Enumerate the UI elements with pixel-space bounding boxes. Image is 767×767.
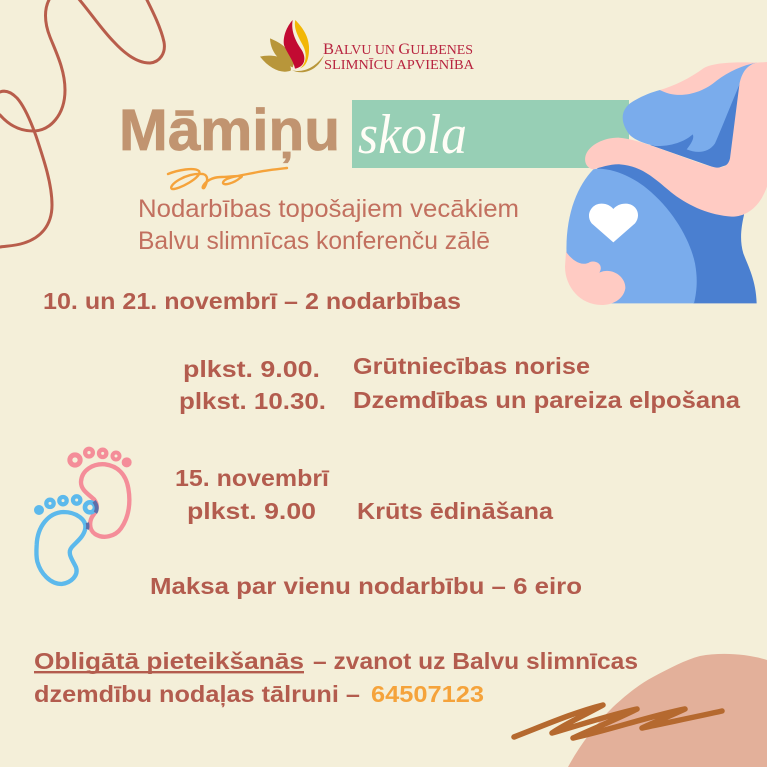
- decorative blob: [568, 654, 767, 767]
- schedule rows: plkst. 10.30.: [179, 388, 326, 414]
- icon: baby feet: [34, 449, 132, 584]
- schedule rows: plkst. 9.00.: [183, 356, 320, 382]
- orange squiggle: [168, 168, 287, 189]
- light blue top: [623, 63, 757, 152]
- registration note: dzemdību nodaļas tālruni –: [34, 681, 360, 707]
- registration note: Obligātā pieteikšanās: [34, 648, 304, 674]
- session: 15 November: [175, 465, 553, 524]
- logo emblem: [260, 20, 324, 72]
- skin: neck and chest: [660, 62, 757, 95]
- hand: [565, 252, 625, 305]
- subtitle: Balvu slimnīcas konferenču zālē: [138, 227, 490, 255]
- registration note: – zvanot uz Balvu slimnīcas: [313, 648, 638, 674]
- green title box: [352, 100, 629, 168]
- subtitle: Nodarbības topošajiem vecākiem: [138, 195, 519, 223]
- logo text: SLIMNĪCU APVIENĪBA: [324, 57, 475, 73]
- title: Māmiņu: Māmiņu: [119, 98, 340, 163]
- schedule rows: [179, 353, 740, 414]
- decorative curve: top left line: [0, 0, 164, 247]
- session: 15 November: plkst. 9.00: [187, 498, 316, 524]
- title: skola: skola: [358, 104, 467, 166]
- schedule rows: Dzemdības un pareiza elpošana: [353, 387, 740, 413]
- orange-brown scribble: [514, 705, 722, 738]
- session: 15 November: 15. novembrī: [175, 465, 330, 491]
- session: 15 November: Krūts ēdināšana: [357, 498, 553, 524]
- dark blue chest: [650, 83, 740, 168]
- logo: [260, 20, 475, 73]
- logo text: BALVU UN GULBENES: [323, 41, 473, 58]
- illustration: pregnant woman: [565, 62, 767, 305]
- skin: arm on belly: [585, 62, 767, 217]
- registration note: [34, 648, 638, 707]
- registration note: 64507123: [371, 681, 484, 707]
- logo text: [323, 41, 475, 73]
- subtitle: [138, 195, 519, 255]
- schedule rows: Grūtniecības norise: [353, 353, 590, 379]
- schedule heading: 10. un 21. novembrī – 2 nodarbības: [43, 288, 461, 314]
- price: Maksa par vienu nodarbību – 6 eiro: [150, 573, 582, 599]
- dark blue body: [597, 157, 757, 303]
- heart: [589, 204, 638, 242]
- light blue belly: [566, 169, 697, 303]
